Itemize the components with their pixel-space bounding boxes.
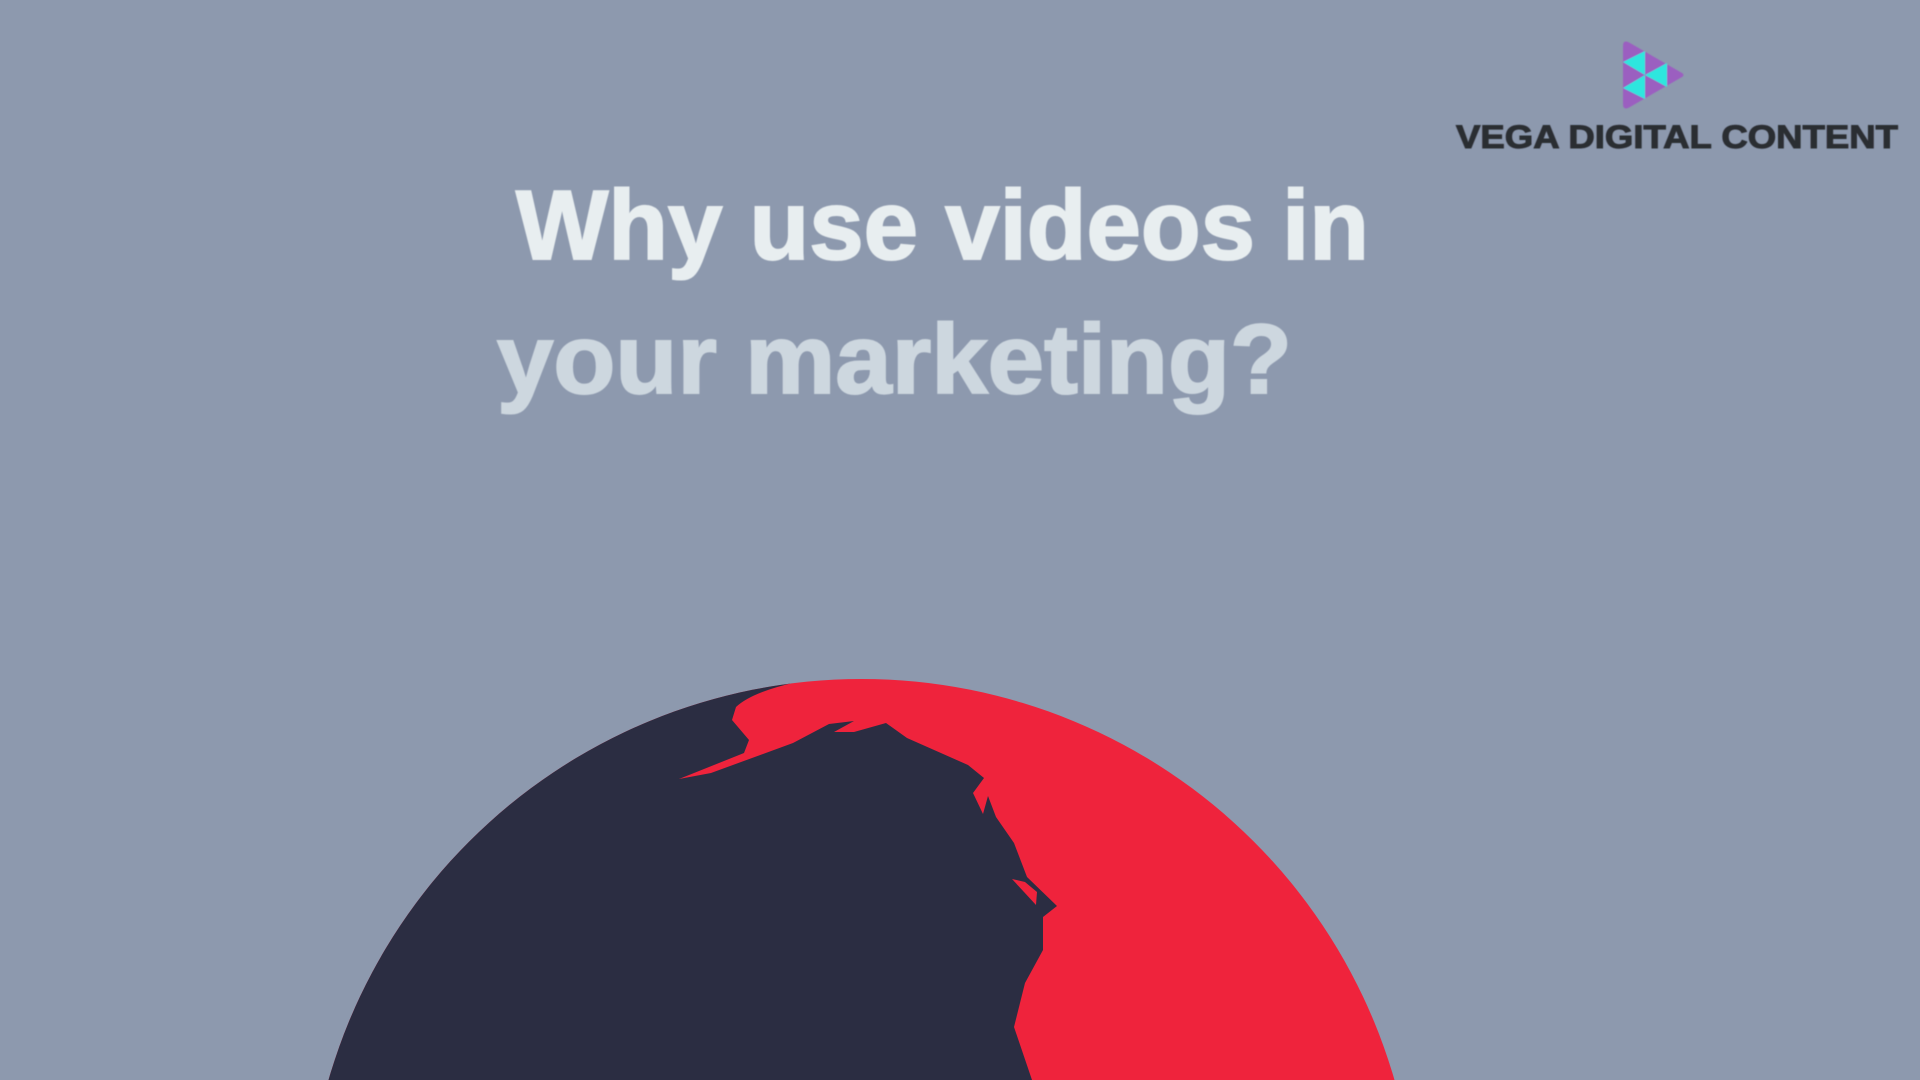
title line 2: your marketing?	[497, 304, 1292, 414]
infographic canvas	[328, 41, 1899, 1080]
title	[497, 170, 1369, 414]
globe lake	[1012, 879, 1037, 905]
icon: play triangle	[1623, 42, 1684, 108]
globe landmass	[300, 670, 1057, 1080]
logo wordmark: VEGA DIGITAL CONTENT	[1456, 119, 1899, 155]
globe	[300, 670, 1420, 1080]
logo: Vega Digital Content	[1456, 42, 1899, 155]
globe ocean	[300, 670, 1420, 1080]
title line 1: Why use videos in	[516, 170, 1369, 280]
